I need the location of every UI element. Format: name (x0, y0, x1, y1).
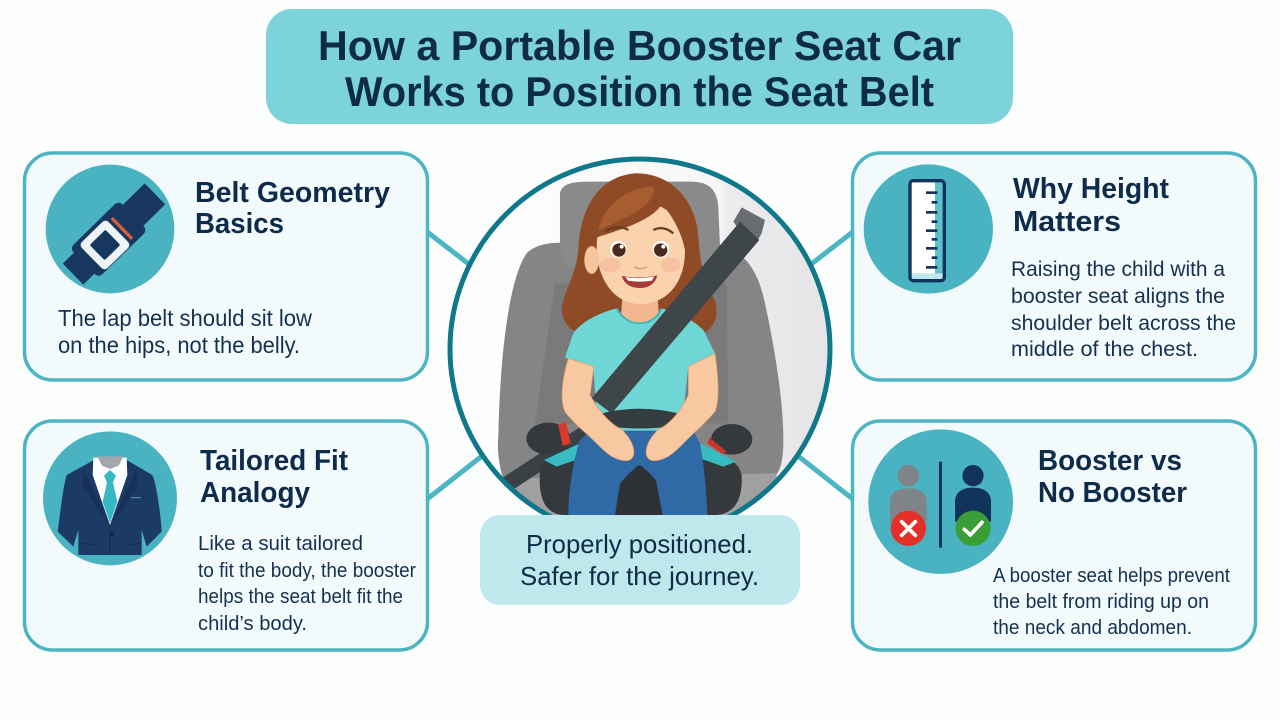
title banner (266, 9, 1013, 124)
heading (195, 177, 390, 240)
body text: A booster seat helps prevent (993, 565, 1230, 587)
heading: Booster vs (1038, 445, 1182, 477)
heading: Why Height (1013, 173, 1169, 205)
circle frame (450, 159, 830, 539)
body text: shoulder belt across the (1011, 312, 1236, 335)
panel: booster vs no booster (852, 421, 1256, 650)
body text: Like a suit tailored (198, 533, 363, 555)
panel: why height matters (852, 153, 1256, 380)
neck (621, 300, 659, 322)
body text: The lap belt should sit low (58, 305, 312, 331)
central illustration: child in booster seat (448, 156, 832, 515)
icon: booster comparison figures (868, 429, 1013, 574)
caption pill (480, 515, 800, 605)
panel: tailored fit analogy (24, 421, 428, 650)
heading: Tailored Fit (200, 445, 348, 477)
arms and hands (562, 353, 718, 461)
connector lines (426, 231, 854, 500)
jeans (568, 431, 707, 515)
body text (198, 533, 416, 635)
icon: ruler (864, 164, 993, 294)
caption pill: Properly positioned. (526, 529, 753, 559)
heading (1038, 445, 1187, 509)
booster centre (615, 465, 663, 515)
caption pill: Safer for the journey. (520, 561, 759, 591)
icon: suit jacket (43, 431, 177, 565)
booster base (526, 422, 752, 515)
hair back (562, 173, 717, 332)
body text: child’s body. (198, 613, 307, 635)
body text: the belt from riding up on (993, 591, 1209, 613)
lower belt strap (503, 428, 586, 488)
body text: helps the seat belt fit the (198, 586, 403, 608)
lap belt (602, 408, 677, 428)
shirt (565, 308, 715, 432)
heading: Analogy (200, 477, 310, 509)
panel: belt geometry basics (24, 153, 428, 380)
body text: on the hips, not the belly. (58, 332, 300, 358)
body text: Raising the child with a (1011, 258, 1225, 281)
icon: seat belt buckle (46, 165, 174, 293)
body text: booster seat aligns the (1011, 285, 1225, 308)
title banner: How a Portable Booster Seat Car (318, 22, 961, 69)
body text (993, 565, 1230, 639)
icon: belt anchor (733, 207, 765, 245)
face and hair front (584, 173, 685, 304)
car seat (498, 182, 783, 550)
body text: to fit the body, the booster (198, 560, 416, 582)
heading: No Booster (1038, 477, 1187, 509)
heading: Belt Geometry (195, 177, 390, 209)
body text (1011, 258, 1236, 361)
title banner: Works to Position the Seat Belt (345, 68, 934, 115)
body text: the neck and abdomen. (993, 617, 1192, 639)
body text: middle of the chest. (1011, 338, 1198, 361)
shoulder belt (592, 222, 759, 413)
heading: Basics (195, 208, 284, 240)
heading (1013, 173, 1169, 238)
heading: Matters (1013, 206, 1121, 238)
heading (200, 445, 348, 509)
body text (58, 305, 312, 358)
